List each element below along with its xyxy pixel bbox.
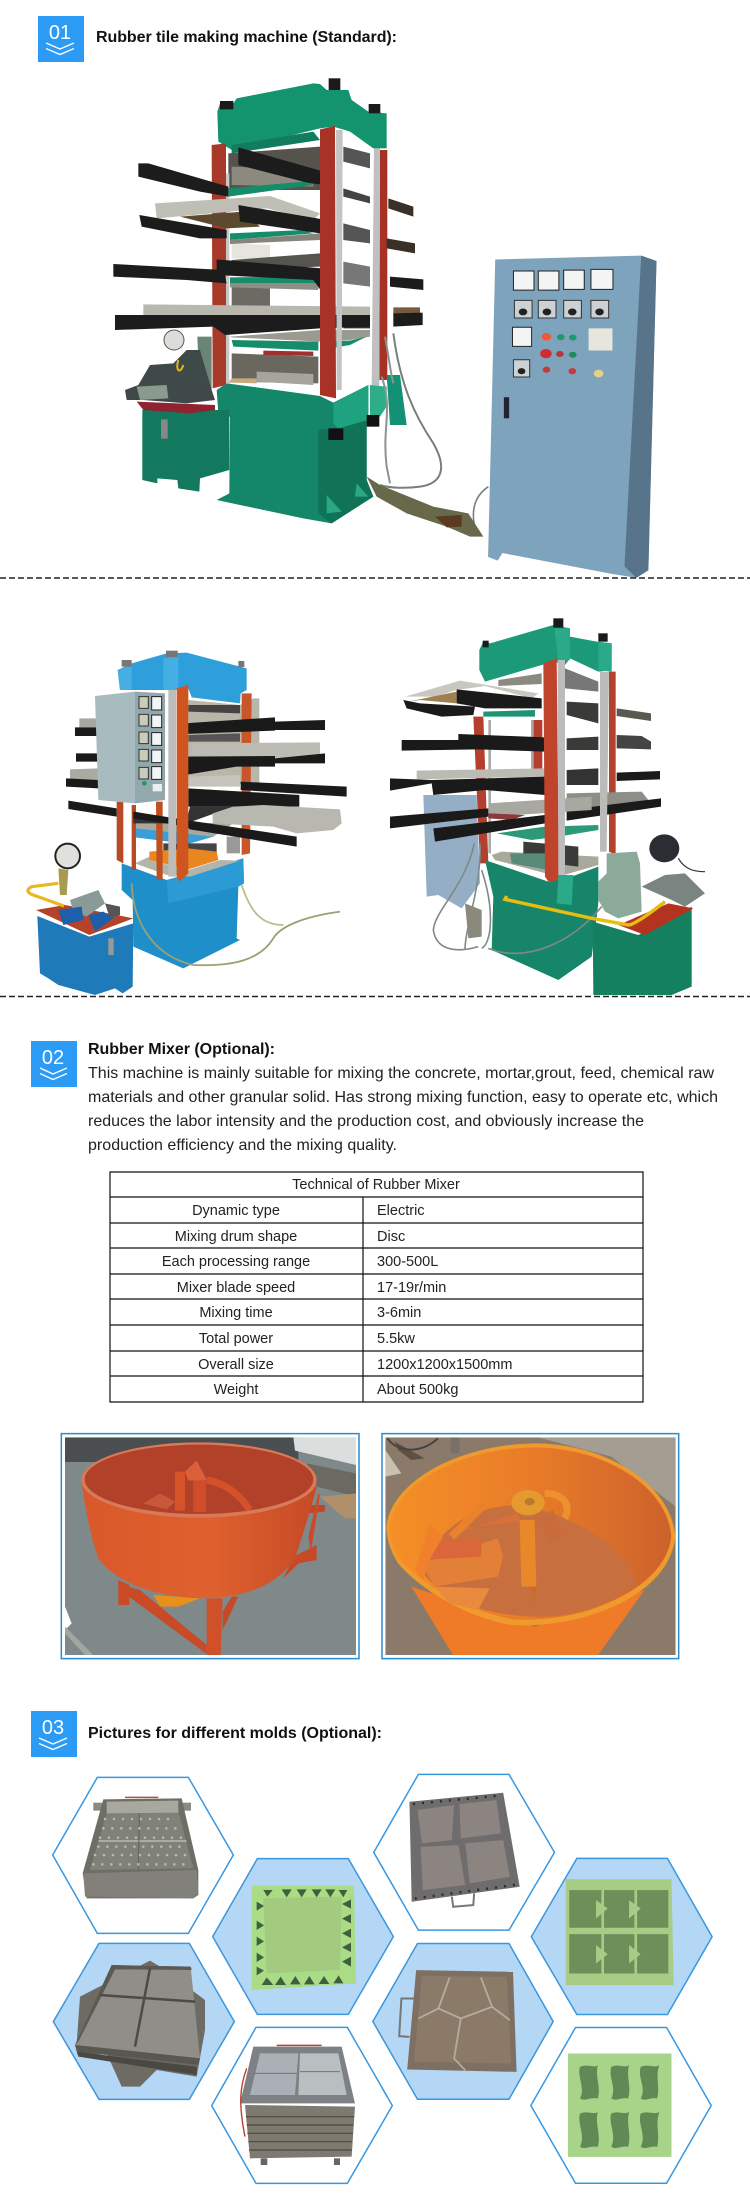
head bbox=[118, 653, 247, 703]
section 03 badge bbox=[31, 1711, 77, 1757]
rear columns bbox=[242, 693, 252, 855]
table: technical of rubber mixer: Dynamic type bbox=[192, 1203, 280, 1219]
control cabinet bbox=[488, 256, 657, 578]
mixer description text: materials and other granular solid. Has strong mixing function, easy to operate etc, which bbox=[88, 1089, 718, 1106]
section 01 badge bbox=[38, 16, 84, 62]
rear cabinet bbox=[423, 795, 480, 908]
hexagon 8: green paver mold bbox=[531, 2027, 711, 2183]
base bbox=[485, 860, 598, 980]
photo panel: red-orange mixer on legs bbox=[61, 1434, 359, 1659]
hexagon 7: steel mold with irregular partitions bbox=[373, 1943, 553, 2099]
tub inner wall bbox=[390, 1447, 671, 1620]
table: technical of rubber mixer: Each processing range bbox=[162, 1254, 310, 1270]
front column and rod bbox=[177, 685, 188, 882]
table: technical of rubber mixer: Mixing time bbox=[199, 1305, 273, 1321]
pump unit bbox=[28, 844, 133, 995]
control box bbox=[95, 692, 165, 803]
photo: blue rubber tile press bbox=[28, 651, 347, 995]
table: technical of rubber mixer: Total power bbox=[199, 1331, 273, 1347]
section 01 heading: Rubber tile making machine (Standard): bbox=[96, 29, 397, 46]
photo: green rubber tile press bbox=[113, 78, 488, 537]
mixer description text: reduces the labor intensity and the production cost, and obviously increase the bbox=[88, 1113, 644, 1130]
front column and rod bbox=[320, 126, 336, 398]
tub floor bbox=[421, 1505, 636, 1617]
lever and side bracket bbox=[309, 1505, 325, 1514]
section 01 badge: 01 bbox=[49, 22, 71, 44]
mixer description text: This machine is mainly suitable for mixing the concrete, mortar,grout, feed, chemical raw bbox=[88, 1065, 714, 1082]
table: technical of rubber mixer: Disc bbox=[377, 1229, 405, 1245]
press top head bbox=[217, 83, 387, 150]
table: technical of rubber mixer: Overall size bbox=[198, 1357, 274, 1373]
hexagon 6: aluminium stacked mold bbox=[212, 2027, 392, 2183]
left trays and arms bbox=[405, 681, 538, 698]
hexagon 1: perforated steel tray bbox=[53, 1777, 233, 1933]
hoses bbox=[132, 883, 340, 965]
head bbox=[498, 673, 542, 686]
photo: green press with pump, rear view bbox=[390, 618, 705, 995]
press interior bbox=[228, 147, 320, 190]
dashed divider bbox=[0, 577, 750, 579]
platens bbox=[228, 182, 313, 197]
hexagon 4: green six-cavity mold bbox=[531, 1858, 712, 2014]
hoses bbox=[380, 333, 441, 488]
table: technical of rubber mixer: 3-6min bbox=[377, 1305, 421, 1321]
section 02 badge bbox=[31, 1041, 77, 1087]
lower plate bbox=[135, 822, 233, 843]
left tray arms and trays bbox=[138, 163, 228, 197]
mixer description text bbox=[88, 1065, 718, 1154]
rear and left arms bbox=[79, 718, 98, 727]
blades and shaft bbox=[431, 1538, 481, 1559]
table: technical of rubber mixer: Mixing drum shape bbox=[175, 1229, 297, 1245]
table: technical of rubber mixer: 17-19r/min bbox=[377, 1280, 446, 1296]
mixer description text: production efficiency and the mixing quality. bbox=[88, 1137, 397, 1154]
section 03 heading: Pictures for different molds (Optional): bbox=[88, 1725, 382, 1742]
photo panel: orange mixer interior view bbox=[382, 1434, 679, 1659]
table: technical of rubber mixer: Technical of Rubber Mixer bbox=[292, 1177, 460, 1193]
rear columns and inner frame bbox=[473, 717, 488, 863]
table: technical of rubber mixer: About 500kg bbox=[377, 1382, 458, 1398]
section 03 badge: 03 bbox=[42, 1717, 64, 1739]
hexagon 3: grey paver mold bbox=[374, 1774, 555, 1930]
section 02 badge: 02 bbox=[42, 1047, 64, 1069]
dashed divider bbox=[0, 996, 750, 998]
hexagon 5: stacked flat steel molds bbox=[53, 1943, 234, 2099]
base bbox=[122, 858, 244, 968]
table: technical of rubber mixer: Weight bbox=[214, 1382, 258, 1398]
table: technical of rubber mixer: Mixer blade speed bbox=[177, 1280, 295, 1296]
hexagon 2: green mold with teeth bbox=[213, 1859, 393, 2014]
front columns and rods bbox=[600, 672, 609, 852]
table: technical of rubber mixer bbox=[110, 1172, 643, 1402]
table: technical of rubber mixer: Electric bbox=[377, 1203, 425, 1219]
table: technical of rubber mixer: 1200x1200x1500mm bbox=[377, 1357, 512, 1373]
right tray stacks bbox=[565, 668, 598, 692]
meters bbox=[513, 271, 534, 290]
hexagon gallery of molds bbox=[53, 1774, 712, 2183]
cables bbox=[433, 843, 478, 950]
hydraulic pump unit bbox=[125, 330, 229, 492]
table: technical of rubber mixer: 5.5kw bbox=[377, 1331, 415, 1347]
base bbox=[387, 375, 407, 425]
table: technical of rubber mixer: 300-500L bbox=[377, 1254, 438, 1270]
tub outer wall bbox=[411, 1587, 645, 1655]
rear columns and rods bbox=[379, 150, 387, 380]
tub body bbox=[82, 1483, 317, 1598]
pump unit bbox=[505, 834, 705, 995]
press interior bbox=[188, 698, 259, 787]
right ends of tray arms bbox=[388, 198, 413, 217]
tub rim bbox=[386, 1443, 675, 1625]
tub interior bbox=[81, 1442, 317, 1518]
section 02 heading: Rubber Mixer (Optional): bbox=[88, 1041, 275, 1058]
mixer legs bbox=[118, 1580, 129, 1605]
